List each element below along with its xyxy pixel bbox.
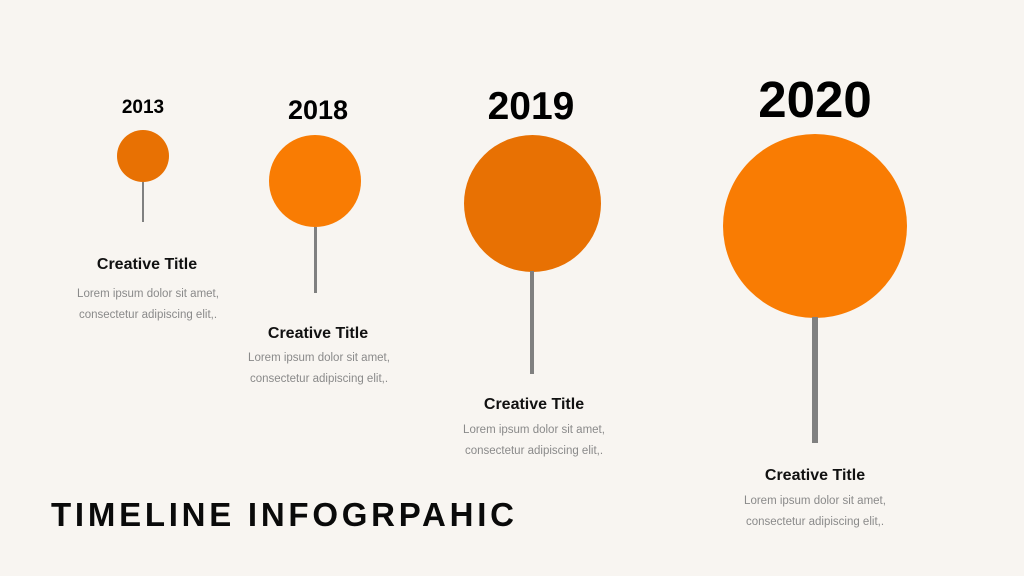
year 2019: 2019 (488, 85, 574, 128)
main title: TIMELINE INFOGRPAHIC (51, 496, 518, 533)
body 2020 (744, 495, 886, 528)
year 2020: 2020 (758, 71, 872, 128)
stem 2018 (314, 227, 317, 293)
stem 2013 (142, 182, 144, 222)
circle 2019 (464, 135, 601, 272)
body 2019 (463, 424, 605, 457)
title 2013: Creative Title (97, 256, 197, 273)
body 2020: Lorem ipsum dolor sit amet, (744, 495, 886, 507)
year 2013: 2013 (122, 97, 164, 118)
body 2018: Lorem ipsum dolor sit amet, (248, 352, 390, 364)
circle 2020 (723, 134, 907, 318)
circle 2013 (117, 130, 169, 182)
body 2018: consectetur adipiscing elit,. (250, 373, 388, 385)
body 2013: Lorem ipsum dolor sit amet, (77, 288, 219, 300)
body 2013: consectetur adipiscing elit,. (79, 309, 217, 321)
year 2018: 2018 (288, 95, 348, 125)
body 2019: consectetur adipiscing elit,. (465, 445, 603, 457)
title 2018: Creative Title (268, 325, 368, 342)
title 2019: Creative Title (484, 396, 584, 413)
body 2020: consectetur adipiscing elit,. (746, 516, 884, 528)
body 2013 (77, 288, 219, 321)
stem 2019 (530, 271, 534, 374)
body 2019: Lorem ipsum dolor sit amet, (463, 424, 605, 436)
stem 2020 (812, 317, 818, 443)
title 2020: Creative Title (765, 467, 865, 484)
circle 2018 (269, 135, 361, 227)
body 2018 (248, 352, 390, 385)
